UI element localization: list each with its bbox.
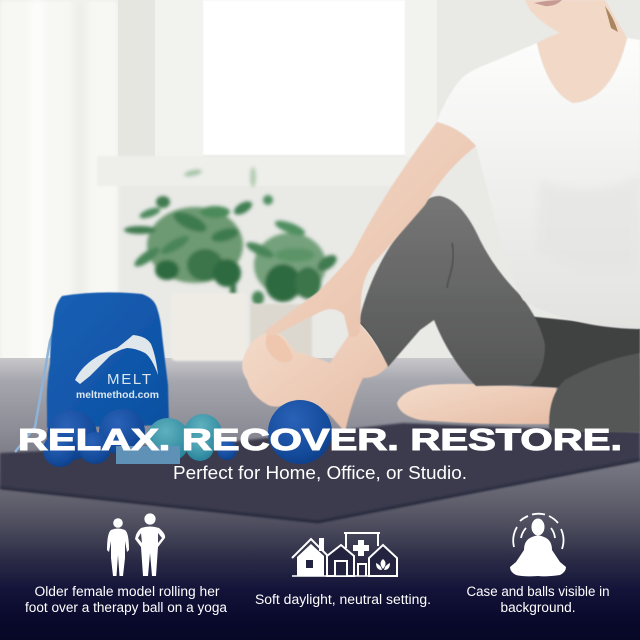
therapy balls group — [43, 409, 237, 467]
icon: meditating figure — [510, 514, 566, 576]
foot on ball — [242, 322, 388, 432]
icon: buildings — [292, 533, 398, 576]
caption: setting: Soft daylight, neutral setting. — [255, 592, 431, 607]
caption: model: Older female model rolling her — [34, 584, 220, 599]
icon: two people — [107, 513, 165, 576]
bag brand text: MELT — [107, 371, 151, 388]
blue MELT bag — [15, 292, 169, 452]
bag logo — [75, 335, 158, 384]
caption: model — [25, 584, 227, 615]
subtitle: Perfect for Home, Office, or Studio. — [173, 463, 467, 483]
yoga mat — [0, 423, 640, 522]
caption: background: background. — [500, 600, 576, 615]
plants — [124, 167, 339, 307]
toes — [266, 333, 293, 363]
caption: model: foot over a therapy ball on a yoga — [25, 600, 227, 615]
caption: background — [466, 584, 610, 615]
therapy ball under foot — [268, 400, 332, 464]
title: RELAX. RECOVER. RESTORE. — [18, 422, 622, 457]
neck and chin — [525, 0, 627, 103]
arm and hand — [265, 122, 476, 337]
shirt — [437, 38, 640, 329]
caption: background: Case and balls visible in — [466, 584, 610, 599]
bag URL text: meltmethod.com — [76, 390, 159, 401]
plant pots — [171, 293, 312, 362]
bent leg in grey leggings — [359, 196, 545, 386]
back leg and foot — [397, 310, 640, 432]
mat lower edge shadow — [0, 460, 640, 522]
